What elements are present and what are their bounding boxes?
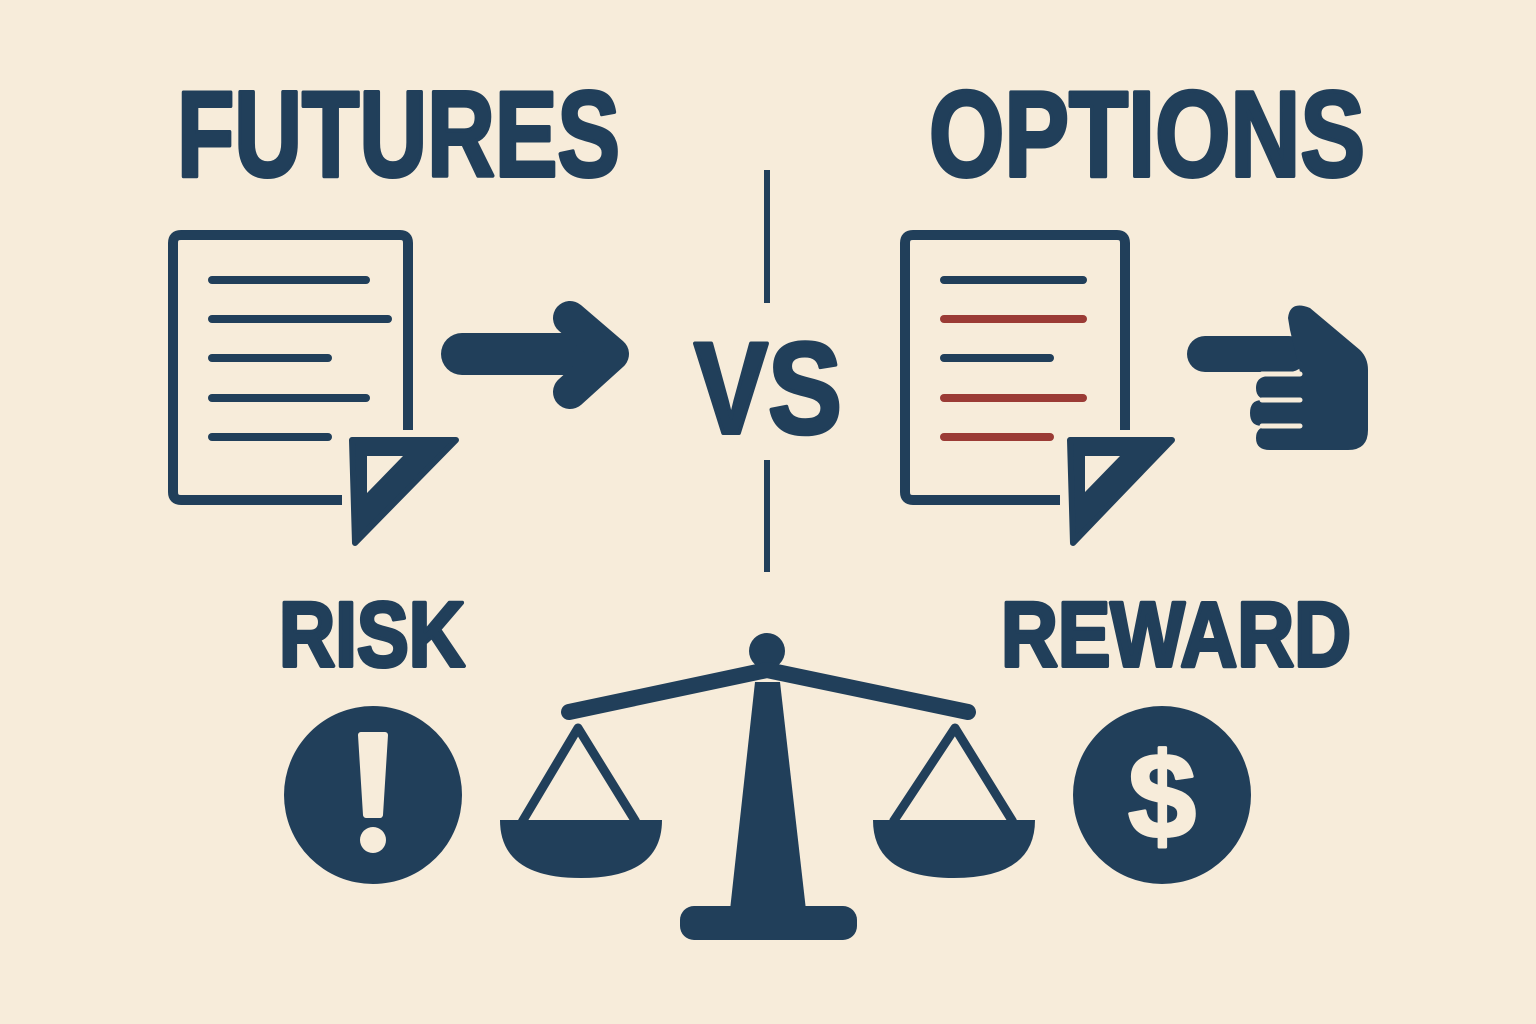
icon: options document (905, 235, 1172, 543)
icon: exclamation circle (284, 706, 462, 884)
title: futures: FUTURES (177, 66, 620, 202)
icon: pointing hand (1187, 306, 1368, 450)
icon: futures document (173, 235, 456, 543)
label: reward: REWARD (1001, 584, 1351, 686)
title: options: OPTIONS (929, 66, 1365, 202)
icon: balance scale (500, 633, 1035, 940)
icon: dollar circle: $ (1128, 728, 1196, 864)
arrow: futures (462, 318, 612, 392)
divider line (764, 170, 770, 572)
vs label: VS (694, 315, 842, 461)
label: risk: RISK (279, 584, 465, 686)
icon: dollar circle (1073, 706, 1251, 884)
